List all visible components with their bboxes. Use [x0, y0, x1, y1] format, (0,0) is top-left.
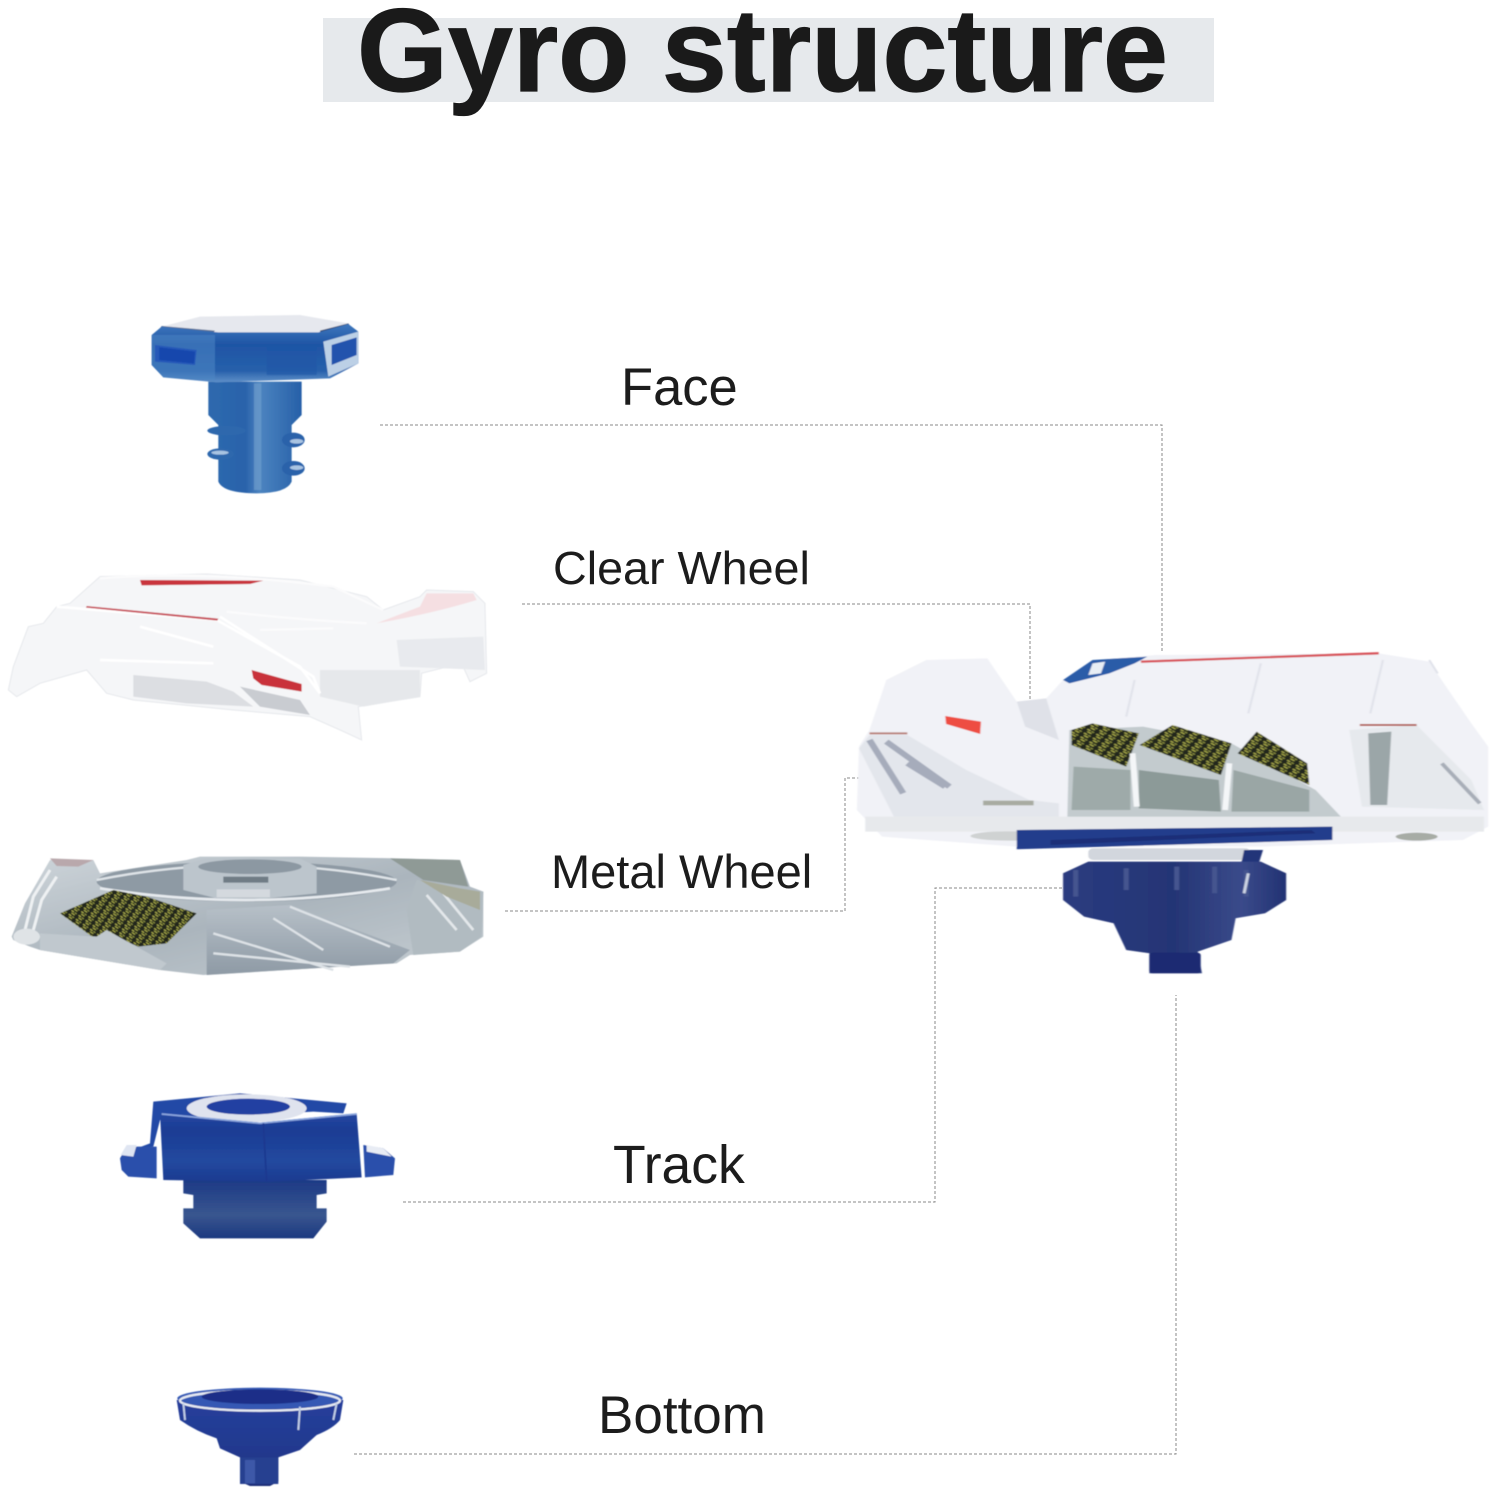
front block — [207, 905, 410, 975]
gear — [1063, 862, 1286, 973]
center metal — [1067, 727, 1341, 820]
label: Track: Track — [613, 1136, 745, 1195]
hub — [183, 858, 317, 898]
label: Clear Wheel: Clear Wheel — [553, 542, 810, 594]
part: Metal Wheel — [12, 847, 483, 975]
head — [152, 324, 358, 382]
right block — [390, 858, 468, 887]
lower plate — [865, 817, 1484, 832]
right chrome block — [1349, 725, 1484, 810]
connector: Face — [380, 425, 1162, 652]
part: Clear Wheel — [8, 574, 487, 740]
ring — [1088, 848, 1250, 860]
connector: Clear Wheel — [522, 604, 1030, 700]
chrome left — [859, 735, 1059, 822]
part: Face — [152, 315, 358, 493]
label: Face: Face — [621, 358, 738, 417]
stickers — [1071, 723, 1139, 767]
clear top — [857, 653, 1488, 847]
stem — [208, 382, 302, 493]
label: Metal Wheel: Metal Wheel — [551, 845, 812, 898]
left chrome — [25, 870, 57, 930]
connector: Bottom — [354, 995, 1176, 1454]
connector: Metal Wheel — [505, 778, 867, 911]
label: Bottom: Bottom — [598, 1386, 766, 1445]
assembled gyro — [857, 653, 1488, 973]
part: Track — [120, 1093, 395, 1238]
track plate — [1017, 827, 1332, 849]
sticker — [60, 890, 197, 947]
connector: Track — [403, 888, 1063, 1202]
part: Bottom — [177, 1388, 343, 1486]
